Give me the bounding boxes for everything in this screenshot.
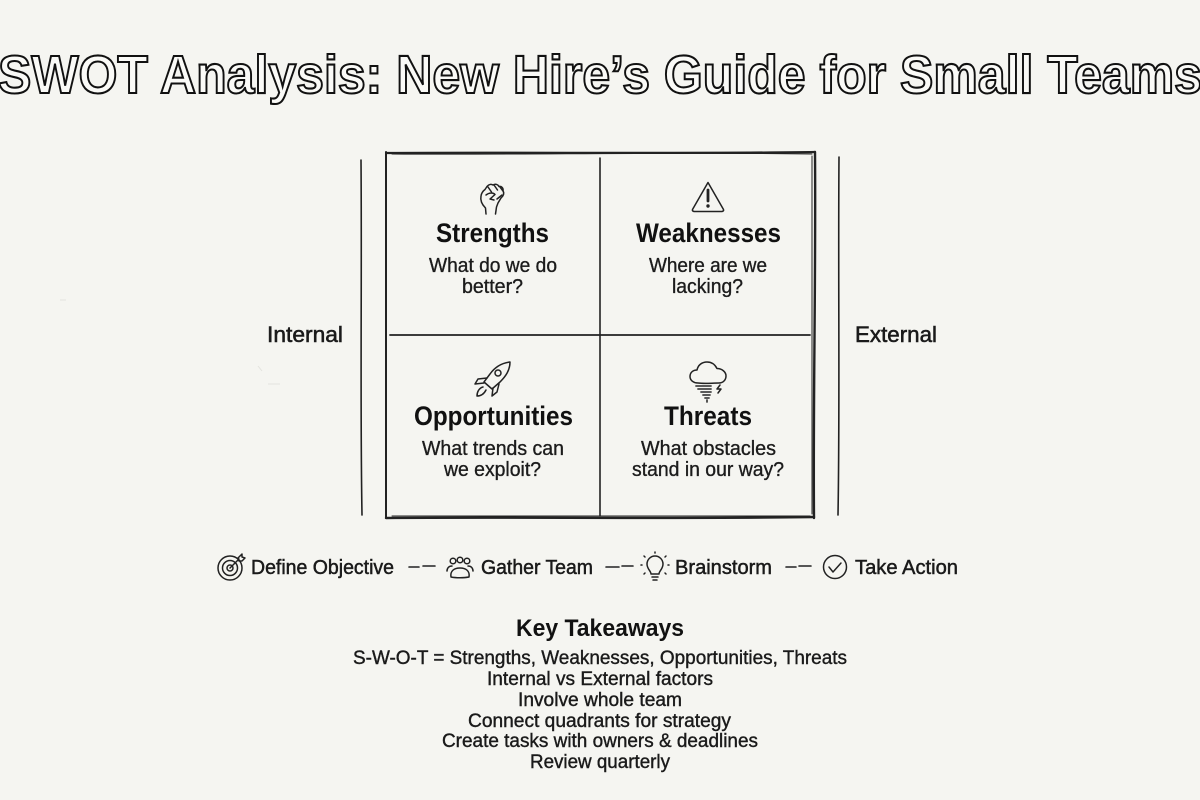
step: define objective (218, 554, 394, 580)
left bracket line: internal (361, 160, 362, 515)
text: strengths question (429, 255, 557, 298)
icon: rocket (475, 362, 510, 396)
heading: key takeaways: Key Takeaways (516, 615, 684, 642)
label: brainstorm: Brainstorm (675, 556, 772, 579)
list: takeaways: Review quarterly (530, 751, 670, 773)
list: takeaways (353, 647, 847, 773)
key takeaways (353, 615, 847, 773)
text: weaknesses question: Where are we (649, 255, 767, 277)
arrow: dashes 3 (786, 566, 811, 567)
label: define objective: Define Objective (251, 556, 394, 579)
icon: light bulb (641, 552, 669, 580)
label: gather team: Gather Team (481, 556, 593, 579)
panel: weaknesses (636, 182, 781, 298)
icon: check circle (824, 556, 846, 578)
text: strengths question: What do we do (429, 255, 557, 277)
text: opportunities question (422, 438, 564, 481)
arrow: dashes 2 (606, 566, 633, 567)
text: threats question: What obstacles (641, 438, 776, 460)
SWOT grid frame (386, 152, 815, 518)
label: external: External (855, 322, 937, 347)
text: weaknesses question (649, 255, 767, 298)
process flow (218, 552, 958, 580)
text: threats question (632, 438, 784, 481)
list: takeaways: Internal vs External factors (487, 668, 713, 690)
text: weaknesses question: lacking? (672, 276, 743, 298)
list: takeaways: Connect quadrants for strategy (468, 710, 731, 732)
text: strengths question: better? (462, 276, 523, 298)
text: opportunities question: What trends can (422, 438, 564, 460)
step: take action (824, 556, 958, 579)
icon: people (447, 557, 473, 578)
panel: opportunities (414, 362, 573, 481)
icon: storm cloud with tornado (690, 362, 726, 402)
right bracket line: external (838, 157, 839, 515)
icon: warning triangle (692, 182, 724, 212)
step: brainstorm (641, 552, 772, 580)
heading: strengths: Strengths (436, 218, 549, 248)
heading: weaknesses: Weaknesses (636, 218, 781, 248)
panel: strengths (429, 184, 557, 298)
panel: threats (632, 362, 784, 481)
list: takeaways: S-W-O-T = Strengths, Weaknesses, Opportunities, Threats (353, 647, 847, 669)
step: gather team (447, 556, 593, 579)
label: take action: Take Action (855, 556, 958, 579)
list: takeaways: Create tasks with owners & deadlines (442, 730, 758, 752)
arrow: dashes 1 (409, 566, 435, 567)
icon: target (218, 554, 245, 580)
icon: fist (481, 184, 504, 214)
label: internal: Internal (267, 322, 343, 347)
text: threats question: stand in our way? (632, 459, 784, 481)
list: takeaways: Involve whole team (518, 689, 682, 711)
heading: opportunities: Opportunities (414, 401, 573, 431)
heading: threats: Threats (664, 401, 752, 431)
text: opportunities question: we exploit? (443, 459, 541, 481)
